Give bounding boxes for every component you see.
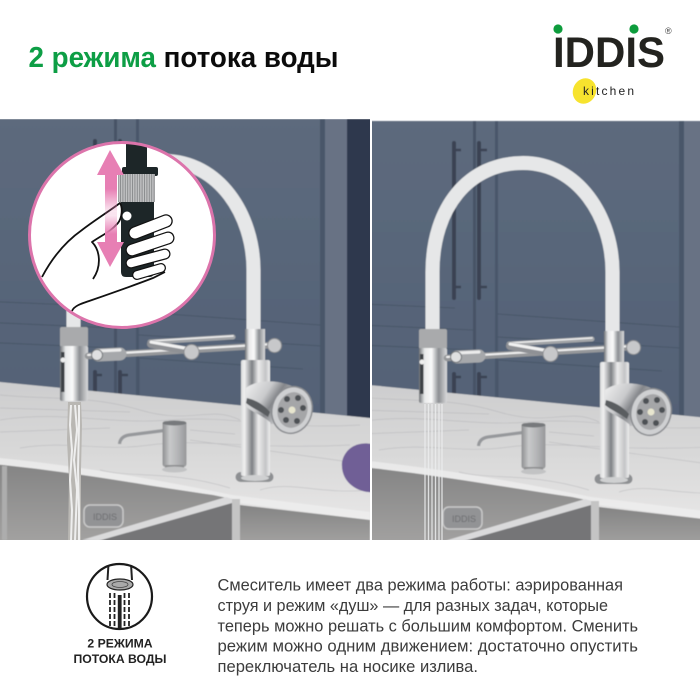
marble counter [0,380,380,530]
title: 2 режима потока воды [28,42,338,74]
wordmark IDDIS: IDDIS [553,29,665,77]
stainless sink [0,463,370,545]
circle background [29,142,215,328]
registered mark: ® [665,26,672,36]
description text: теперь можно решать с большим комфортом. Сменить [218,618,638,636]
icon caption: ПОТОКА ВОДЫ [74,652,167,666]
cabinets [0,119,380,429]
inset circle: pull-down switch [29,135,215,328]
icon caption: 2 РЕЖИМА [87,636,153,650]
water: shower stream [425,404,442,540]
fingers [131,221,168,275]
soap dispenser [120,420,187,472]
description text: струя и режим «душ» — для разных задач, которые [218,597,608,615]
stainless sink: IDDIS [93,512,117,522]
yellow spot behind kitchen [569,74,600,108]
pink ring [30,142,214,328]
faucet head [60,327,88,401]
spray head [118,135,158,277]
side lever [245,381,317,438]
panel: right photo, shower stream [372,120,700,540]
brand logo: IDDIS kitchen [553,24,672,108]
kitchen wordmark: kitchen [583,84,634,98]
description text: режим можно одним движением: достаточно опустить [218,638,638,656]
water: aerated stream [67,402,82,540]
faucet body [236,329,274,482]
purple stone [342,443,375,492]
connecting arm [88,336,282,360]
pink double arrow [97,150,124,267]
description text: Смеситель имеет два режима работы: аэрированная [218,577,623,595]
icon: aerator with two stream modes [87,564,152,631]
hand palm and thumb [42,203,165,311]
white spout arch [74,161,254,332]
panel: left photo, aerated stream [0,119,380,545]
description text: переключатель на носике излива. [218,658,478,676]
hand and spray head illustration [42,135,168,311]
green dots [553,24,639,34]
description text [218,577,638,676]
